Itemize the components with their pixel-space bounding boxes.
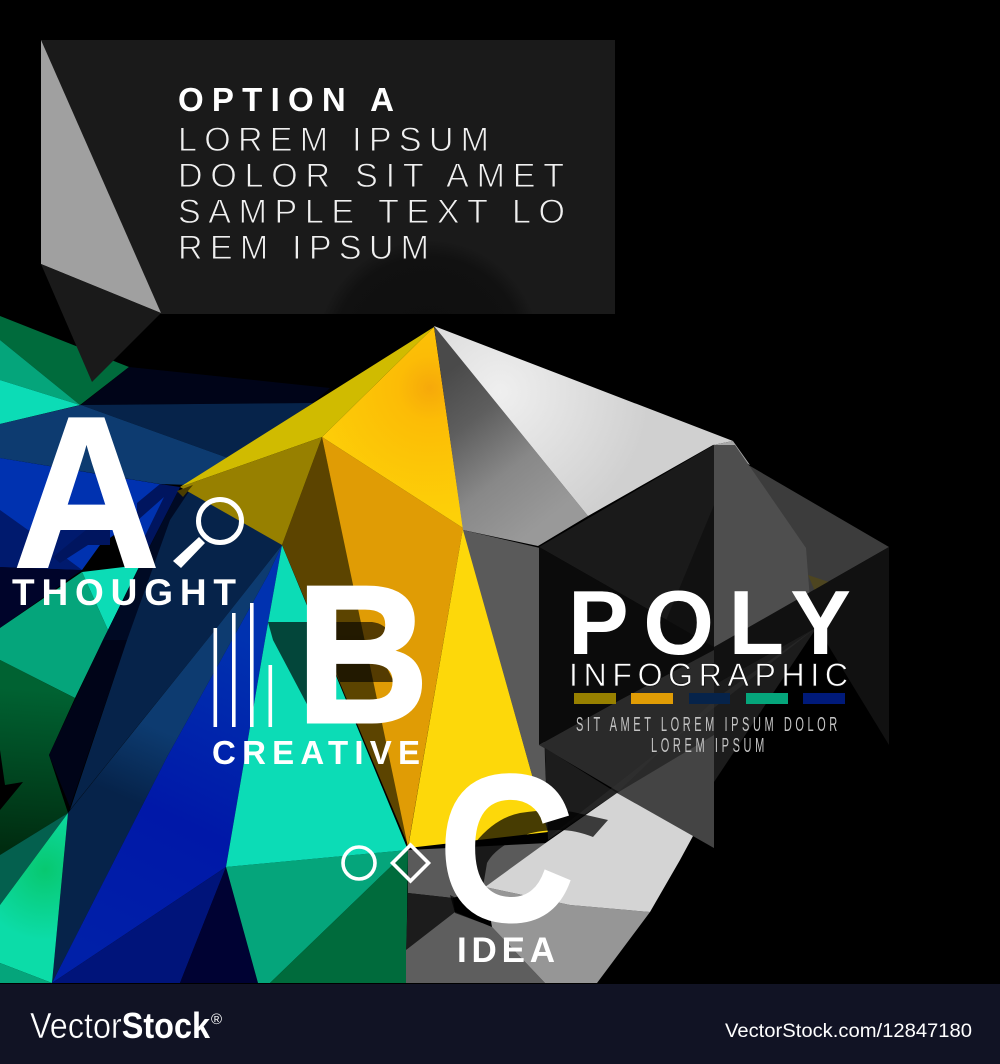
icon: magnifier: [173, 500, 242, 568]
footer bar: [0, 984, 1000, 1064]
footer url: VectorStock.com/12847180: [725, 1020, 972, 1042]
option body text: LOREM IPSUM: [178, 121, 489, 159]
registered mark: ®: [211, 1011, 222, 1028]
icon: vertical bars: [214, 603, 272, 727]
label: creative: CREATIVE: [212, 734, 420, 771]
label: idea: IDEA: [457, 931, 555, 970]
caption text: LOREM IPSUM: [651, 735, 764, 757]
option body text: SAMPLE TEXT LO: [178, 193, 565, 231]
footer logo: VectorStock: [30, 1005, 211, 1046]
letter A shadow bands: [53, 525, 110, 563]
option body text: DOLOR SIT AMET: [178, 157, 564, 195]
caption text: SIT AMET LOREM IPSUM DOLOR: [576, 714, 837, 736]
colour legend bars: [574, 693, 845, 704]
option body text: [178, 121, 565, 267]
option heading: OPTION A: [178, 81, 394, 118]
label: thought: THOUGHT: [12, 572, 236, 613]
light grey facet below hexagon: [485, 793, 693, 912]
caption text: [576, 714, 837, 757]
top panel: option A: [41, 40, 615, 382]
letter B shadow: [322, 622, 394, 682]
icon: circle outline: [343, 847, 375, 879]
folded corner dark facet: [41, 264, 161, 382]
folded corner light facet: [41, 40, 161, 313]
colourful low-poly shape: left blue and green facets: [0, 316, 408, 983]
panel shadow circle: [339, 255, 516, 314]
letter C: C: [439, 733, 574, 965]
translucent hexagon panel: [539, 445, 889, 848]
colourful low-poly shape: yellow and amber facets: [177, 327, 548, 848]
panel background: [41, 40, 615, 314]
option body text: REM IPSUM: [178, 229, 429, 267]
letter A: A: [13, 371, 160, 613]
letter B: B: [296, 545, 429, 764]
letter C shadow: [450, 810, 608, 923]
grey low-poly shape: upper and lower facets: [406, 326, 750, 983]
title: poly: POLY: [568, 573, 851, 674]
poly title block: [568, 573, 851, 757]
subtitle: infographic: INFOGRAPHIC: [569, 657, 848, 693]
icon: diamond outline: [392, 845, 428, 881]
